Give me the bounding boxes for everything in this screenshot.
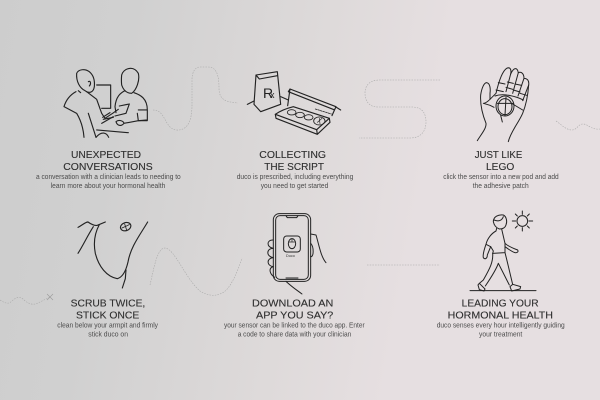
dotted connector: lower middle bump xyxy=(150,248,242,295)
panel: leading your hormonal health: your treatment xyxy=(479,332,522,338)
heading: JUST LIKE xyxy=(475,150,522,161)
panel: collecting the script: x xyxy=(270,90,275,100)
panel: just like lego xyxy=(443,68,559,190)
heading: SCRUB TWICE, xyxy=(71,298,145,310)
panel: scrub twice, stick once: STICK ONCE xyxy=(76,310,140,322)
icon text: Duco: Duco xyxy=(286,254,295,258)
panel: collecting the script xyxy=(237,72,353,190)
panel: unexpected conversations: learn more about your hormonal health xyxy=(51,183,165,190)
panel: download an app xyxy=(224,214,365,338)
description: click the sensor into a new pod and add xyxy=(443,174,559,181)
panel: download an app: APP YOU SAY? xyxy=(256,310,334,321)
panel: unexpected conversations xyxy=(36,68,181,190)
panel: just like lego: the adhesive patch xyxy=(473,183,529,190)
icon: prescription bag and pod box xyxy=(247,72,341,134)
description: duco senses every hour intelligently guiding xyxy=(437,322,565,330)
panel: scrub twice, stick once: stick duco on xyxy=(88,332,128,338)
icon text: Rx: R xyxy=(263,85,273,101)
dotted connector: lower left wave xyxy=(0,297,50,304)
panel: collecting the script: you need to get started xyxy=(261,183,328,190)
icon: person walking under sun xyxy=(470,211,536,291)
description: a conversation with a clinician leads to needing to xyxy=(36,174,181,181)
panel: download an app: a code to share data with your clinician xyxy=(238,332,351,338)
dotted connector: lower right line xyxy=(367,264,440,266)
panel: collecting the script: THE SCRIPT xyxy=(264,162,324,173)
panel: unexpected conversations: CONVERSATIONS xyxy=(63,162,153,173)
dotted connector: S curve xyxy=(359,80,440,138)
panel: scrub twice, stick once xyxy=(57,221,159,338)
icon: armpit with sensor xyxy=(78,221,148,288)
panel: just like lego: LEGO xyxy=(486,162,514,173)
icon: clinician and patient xyxy=(64,68,147,137)
icon: hand holding sensor xyxy=(477,68,529,142)
heading: DOWNLOAD AN xyxy=(252,298,333,309)
icon: hand holding phone xyxy=(268,214,326,294)
description: duco is prescribed, including everything xyxy=(237,174,353,181)
panel: leading your hormonal health: HORMONAL HEALTH xyxy=(448,310,553,321)
dotted connector: top left xyxy=(153,67,238,130)
description: your sensor can be linked to the duco app. Enter xyxy=(224,322,365,330)
heading: UNEXPECTED xyxy=(71,150,141,161)
cross mark xyxy=(47,294,53,300)
heading: COLLECTING xyxy=(259,150,326,161)
description: clean below your armpit and firmly xyxy=(57,322,159,330)
dotted connector: top right wave xyxy=(556,121,600,130)
heading: LEADING YOUR xyxy=(462,298,539,309)
panel: leading your hormonal health xyxy=(437,211,565,338)
